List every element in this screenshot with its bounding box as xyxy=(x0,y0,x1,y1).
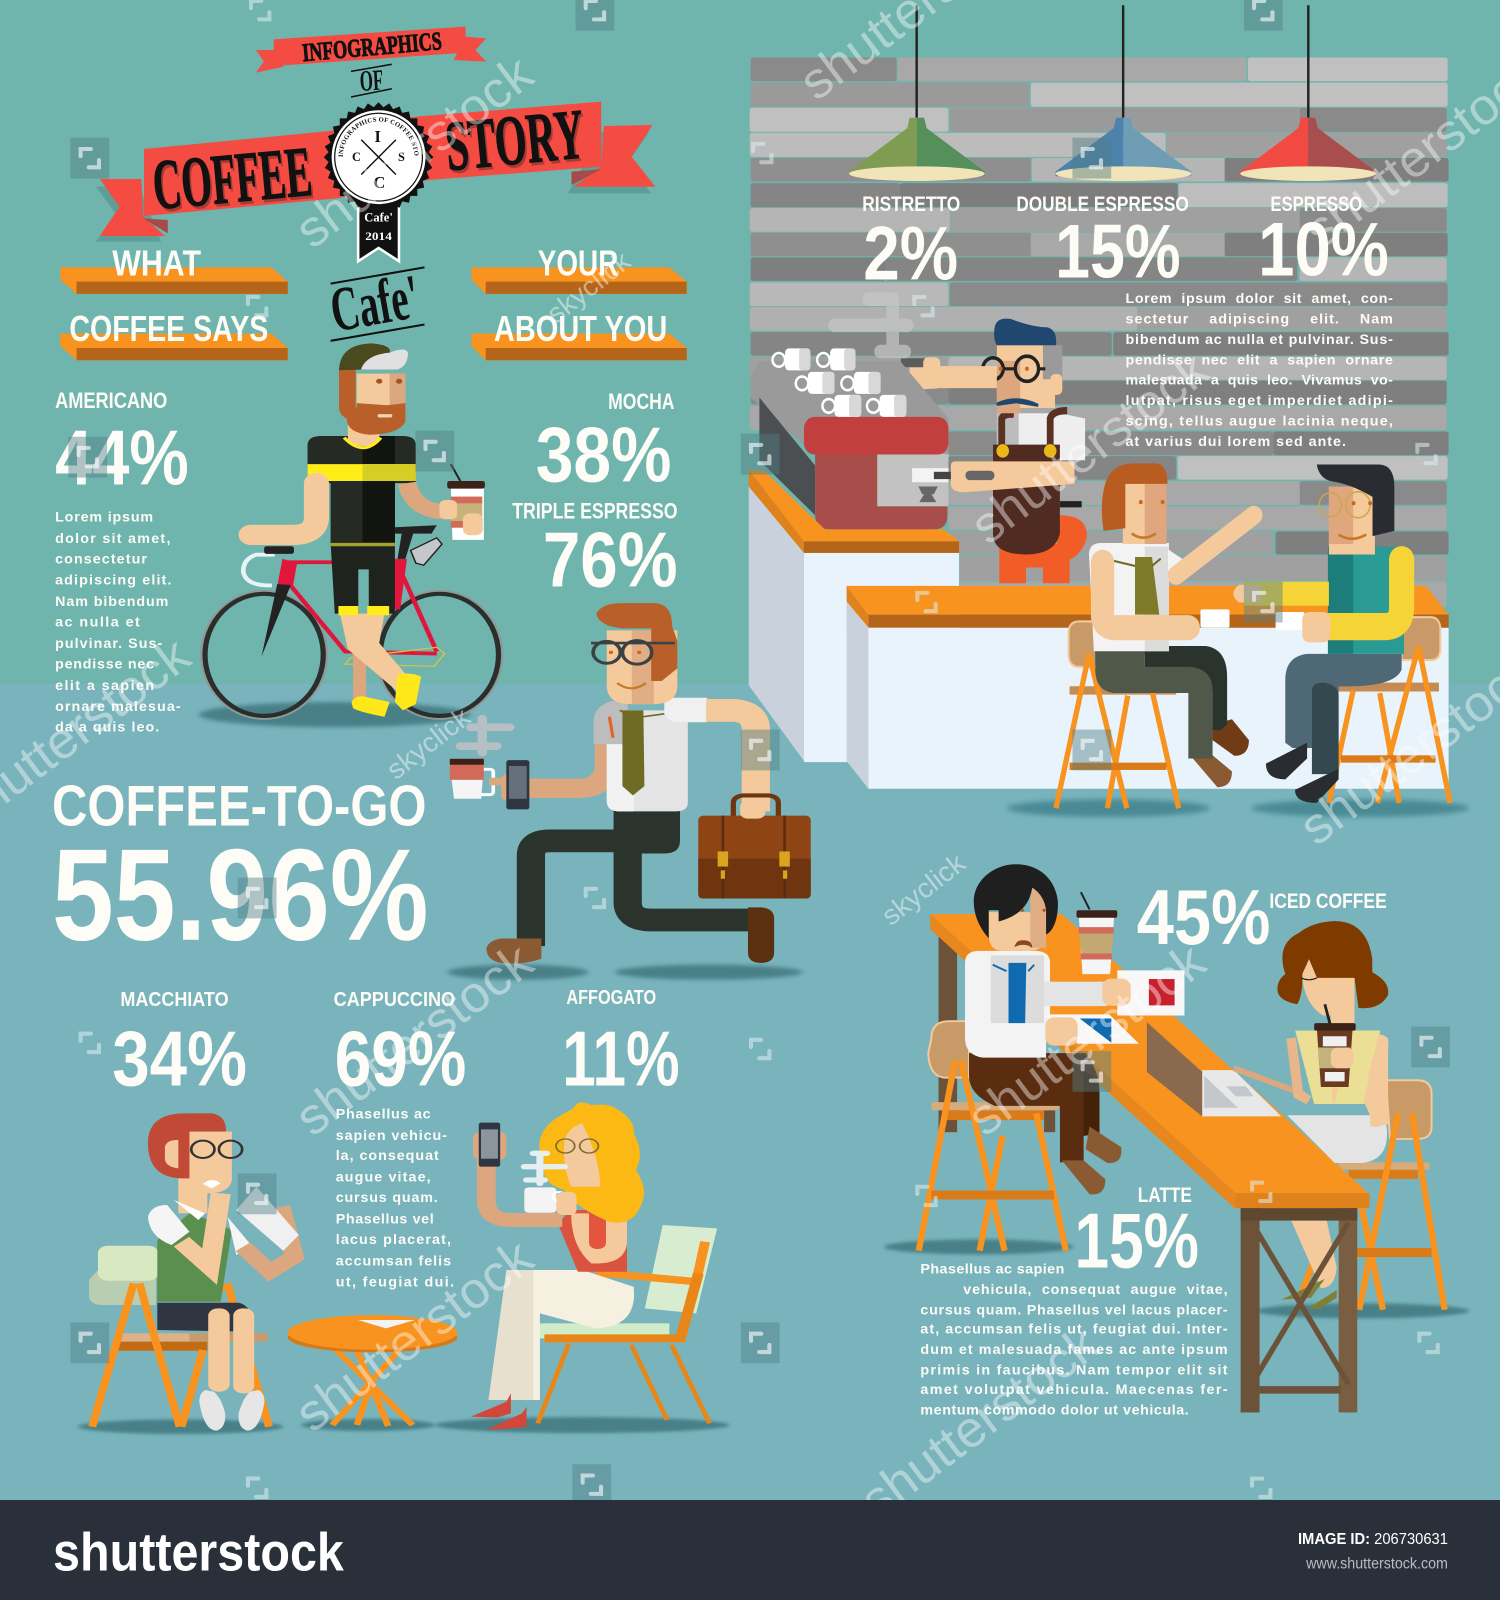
shelf heading: your about you xyxy=(471,244,687,360)
espresso machine xyxy=(751,361,951,529)
percent: espresso: 10% xyxy=(1258,208,1389,293)
body text: americano: pulvinar. Sus- xyxy=(55,636,162,652)
cafe lettering xyxy=(325,261,425,345)
shelf heading: what coffee says: COFFEE SAYS xyxy=(69,309,268,349)
body text: americano: ac nulla et xyxy=(55,615,140,631)
body text: americano: Nam bibendum xyxy=(55,594,168,610)
shelf heading: your about you: YOUR xyxy=(538,244,619,284)
watermark: shutterstock text: skyclick xyxy=(875,847,971,931)
customer right xyxy=(1233,464,1404,803)
body text: espresso: pendisse nec elit a sapien ornare xyxy=(1126,352,1393,368)
affogato woman xyxy=(471,1102,644,1430)
label: ristretto: RISTRETTO xyxy=(862,192,960,216)
shadows xyxy=(78,1417,730,1434)
title text: story: STORY xyxy=(442,94,588,186)
body text: cappuccino: cursus quam. xyxy=(336,1190,438,1206)
back table legs xyxy=(939,937,1055,1132)
percent: latte: 15% xyxy=(1074,1198,1199,1284)
body text: latte: at, accumsan felis ut, feugiat dui. Inter- xyxy=(920,1322,1228,1338)
watermark: shutterstock text: shutterstock xyxy=(960,340,1219,555)
body text: cappuccino xyxy=(336,1106,454,1291)
barista xyxy=(901,319,1087,583)
badge: 2014 xyxy=(365,231,392,243)
label: espresso: ESPRESSO xyxy=(1270,192,1362,216)
body text: cappuccino: accumsan felis xyxy=(336,1253,451,1269)
cyclist legs xyxy=(340,614,421,717)
body text: latte: Phasellus ac sapien xyxy=(920,1261,1064,1277)
back counter xyxy=(749,470,959,762)
shadow xyxy=(199,702,471,727)
woman xyxy=(1234,921,1388,1163)
big ribbon xyxy=(96,102,655,242)
front counter xyxy=(847,586,1449,789)
legs xyxy=(486,809,774,963)
stool left xyxy=(1056,621,1179,808)
body text: americano: dolor sit amet, xyxy=(55,531,170,547)
watermark: shutterstock text: shutterstock xyxy=(957,932,1216,1147)
label: double espresso: DOUBLE ESPRESSO xyxy=(1016,192,1189,216)
body text: americano: consectetur xyxy=(55,551,147,567)
scene: lower left seated women xyxy=(78,1102,730,1434)
title text: story xyxy=(442,94,590,189)
body text: latte: dum et malesuada fames ac ante ipsum xyxy=(920,1342,1228,1358)
body text: espresso: bibendum ac nulla et pulvinar. Sus- xyxy=(1126,332,1393,348)
cafe lettering: Cafe' xyxy=(325,261,425,345)
table xyxy=(930,914,1370,1412)
watermark: shutterstock text: shutterstock xyxy=(285,1228,543,1442)
body text: americano: Lorem ipsum xyxy=(55,509,153,525)
table cup xyxy=(1077,892,1117,974)
body text: espresso xyxy=(1126,291,1393,450)
watermark: shutterstock text: shutterstock xyxy=(285,932,543,1147)
espresso cups xyxy=(772,348,906,417)
percent: macchiato: 34% xyxy=(112,1017,247,1103)
percent: cappuccino: 69% xyxy=(335,1017,466,1103)
lamp: blue xyxy=(1056,5,1191,181)
badge xyxy=(324,102,434,264)
body text: cappuccino: augue vitae, xyxy=(336,1170,431,1186)
steam xyxy=(835,299,907,351)
brick wall xyxy=(750,58,1449,607)
shadows xyxy=(884,1239,1469,1318)
body text: espresso: lutpat, risus eget imperdiet adipi- xyxy=(1126,393,1393,409)
badge: S xyxy=(398,150,405,164)
body text: latte: mentum commodo dolor ut vehicula. xyxy=(920,1402,1189,1418)
footer url: www.shutterstock.com xyxy=(1305,1555,1448,1572)
body text: americano: da a quis leo. xyxy=(55,720,159,736)
cyclist head xyxy=(339,343,408,435)
percent: ristretto: 2% xyxy=(863,212,958,297)
body text: cappuccino: Phasellus ac xyxy=(336,1106,431,1122)
body text: espresso: malesuada a quis leo. Vivamus vo- xyxy=(1126,373,1393,389)
body text: americano: elit a sapien xyxy=(55,678,154,694)
shirt xyxy=(594,698,707,811)
watermark: shutterstock text: shutterstock xyxy=(285,44,543,259)
body text: cappuccino: lacus placerat, xyxy=(336,1232,451,1248)
footer logo: shutterstock xyxy=(53,1522,345,1582)
body text: latte xyxy=(920,1261,1228,1418)
shelf heading: your about you: ABOUT YOU xyxy=(494,309,667,349)
badge: Cafe' xyxy=(364,210,393,224)
body text: espresso: at varius dui lorem sed ante. xyxy=(1126,434,1346,450)
percent: iced coffee: 45% xyxy=(1137,875,1270,961)
shelf heading: what coffee says: WHAT xyxy=(112,244,201,284)
badge: C xyxy=(352,150,361,164)
man xyxy=(965,864,1184,1194)
right arm xyxy=(706,710,756,811)
title text: of: OF xyxy=(359,65,384,98)
label: americano: AMERICANO xyxy=(55,388,167,413)
label: macchiato: MACCHIATO xyxy=(120,989,229,1011)
briefcase xyxy=(698,795,811,899)
head xyxy=(591,603,677,704)
body text: espresso: Lorem ipsum dolor sit amet, con- xyxy=(1126,291,1393,307)
body text: latte: primis in faucibus. Nam tempor elit sit xyxy=(920,1362,1228,1378)
body text: latte: amet volutpat vehicula. Maecenas fer- xyxy=(920,1382,1228,1398)
heading: coffee-to-go: COFFEE-TO-GO xyxy=(52,775,427,839)
lamp: red xyxy=(1240,5,1376,181)
percent: coffee-to-go: 55.96% xyxy=(52,822,429,968)
percent: affogato: 11% xyxy=(562,1017,680,1103)
label: affogato: AFFOGATO xyxy=(566,987,656,1009)
body text: latte: vehicula, consequat augue vitae, xyxy=(963,1282,1228,1298)
scene: long table with two people xyxy=(884,864,1469,1412)
title text: story: STORY xyxy=(444,97,590,189)
label: latte: LATTE xyxy=(1138,1183,1192,1207)
title text: coffee: COFFEE xyxy=(149,132,315,225)
footer bar xyxy=(0,1500,1500,1600)
percent: mocha: 38% xyxy=(536,413,671,499)
shelf heading: what coffee says xyxy=(60,244,288,360)
title text: coffee: COFFEE xyxy=(151,135,317,228)
illustration: cyclist with bike xyxy=(199,343,502,727)
percent: double espresso: 15% xyxy=(1055,210,1181,295)
badge: C xyxy=(373,173,385,192)
badge: I xyxy=(374,127,381,146)
shadows xyxy=(447,965,803,980)
title: ribbon banner xyxy=(96,26,656,264)
laptop xyxy=(1147,1022,1281,1116)
body text: espresso: scing, tellus augue lacinia neque, xyxy=(1126,414,1393,430)
lamp: green xyxy=(849,5,985,181)
percent: americano: 44% xyxy=(55,416,189,502)
left arm and coffee and phone xyxy=(450,719,607,809)
percent: triple espresso: 76% xyxy=(543,518,678,604)
watermark: shutterstock text: skyclick xyxy=(381,701,476,785)
label: iced coffee: ICED COFFEE xyxy=(1269,889,1387,913)
woman legs xyxy=(1281,1221,1337,1309)
body text: americano xyxy=(55,509,181,736)
cyclist body xyxy=(251,422,445,615)
cafe table xyxy=(288,1315,457,1426)
stool man xyxy=(919,1021,1066,1251)
macchiato chair xyxy=(89,1246,269,1427)
body text: latte: cursus quam. Phasellus vel lacus placer- xyxy=(920,1302,1228,1318)
body text: cappuccino: la, consequat xyxy=(336,1148,439,1164)
body text: americano: adipiscing elit. xyxy=(55,573,171,589)
rear bicycle wheels and frame xyxy=(201,525,502,719)
body text: americano: pendisse nec xyxy=(55,656,154,672)
stool right xyxy=(1329,617,1450,803)
body text: americano: ornare malesua- xyxy=(55,699,181,715)
scene: cafe bar with barista and customers xyxy=(749,5,1469,817)
affogato chair xyxy=(533,1225,717,1423)
body text: espresso: sectetur adipiscing elit. Nam xyxy=(1126,311,1393,327)
body text: cappuccino: sapien vehicu- xyxy=(336,1128,447,1144)
title text: coffee xyxy=(149,132,317,228)
stool woman xyxy=(1301,1080,1445,1310)
label: triple espresso: TRIPLE ESPRESSO xyxy=(512,498,678,523)
title text: infographics: INFOGRAPHICS xyxy=(301,26,443,67)
cyclist cup xyxy=(439,464,485,540)
floor shadows xyxy=(1007,799,1469,817)
watermark: shutterstock text: shutterstock xyxy=(850,1314,1109,1529)
body text: cappuccino: Phasellus vel xyxy=(336,1211,434,1227)
watermark: shutterstock text: skyclick xyxy=(541,245,636,329)
small ribbon xyxy=(256,27,486,73)
body text: cappuccino: ut, feugiat dui. xyxy=(336,1275,454,1291)
label: mocha: MOCHA xyxy=(608,389,674,414)
title text: of xyxy=(351,64,392,98)
footer image id: IMAGE ID: 206730631 xyxy=(1298,1531,1448,1548)
macchiato woman xyxy=(148,1113,299,1431)
label: cappuccino: CAPPUCCINO xyxy=(334,989,455,1011)
customer left xyxy=(1089,463,1254,787)
illustration: running businessman xyxy=(447,603,811,980)
